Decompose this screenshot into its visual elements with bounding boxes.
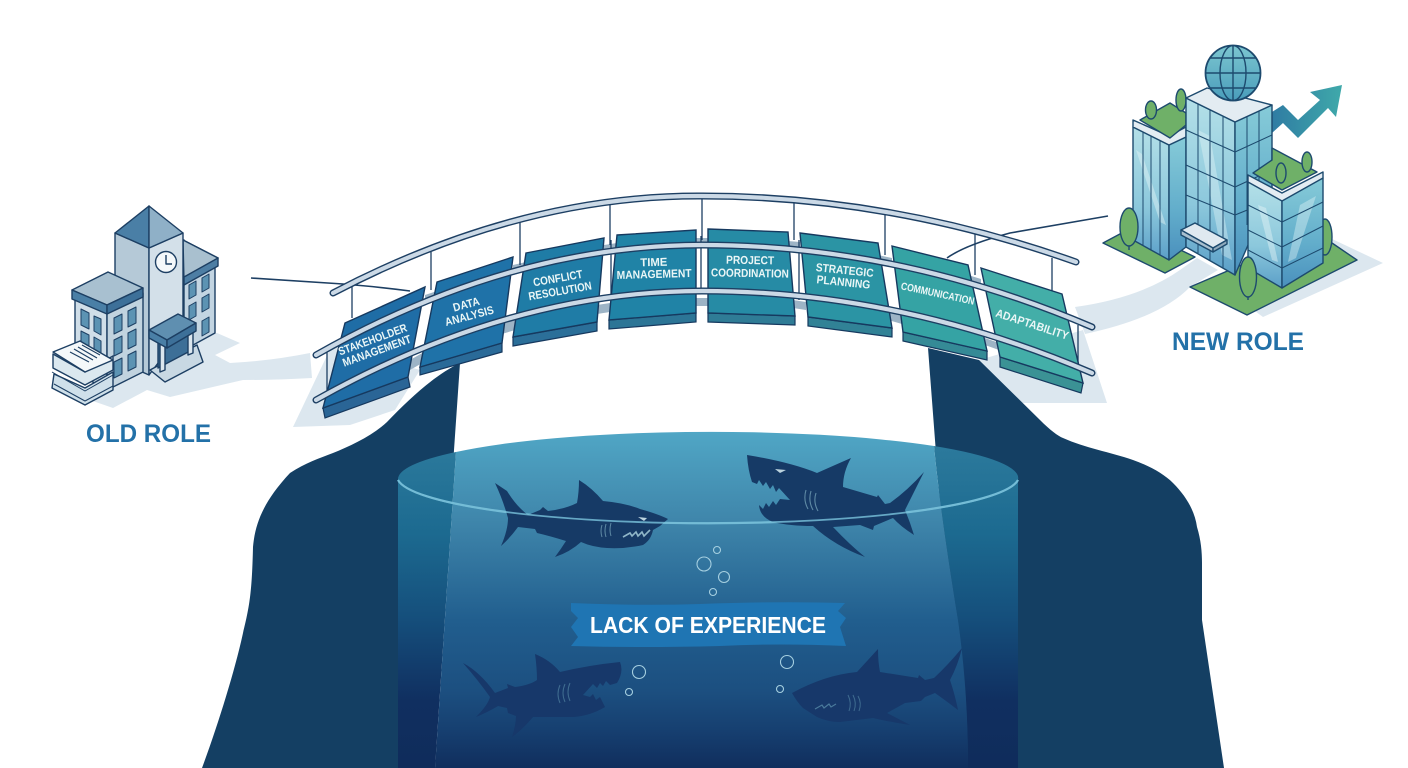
plank: communication: COMMUNICATION [900,280,976,308]
left tower [1133,89,1186,260]
lawn: left [1103,227,1195,273]
label: new role: NEW ROLE [1172,328,1304,356]
handrail: middle [316,245,1092,355]
plank: data analysis: ANALYSIS [444,304,496,329]
bridge [316,196,1092,418]
clock tower [115,206,183,375]
plank: time management [609,230,696,329]
plank: stakeholder management: STAKEHOLDER [337,322,409,358]
plank: data analysis: DATA [452,296,481,314]
plank: project coordination: COORDINATION [711,267,789,281]
shark: top right [747,455,924,557]
plank: project coordination [708,229,795,325]
plank: stakeholder management [323,287,425,418]
ground path: old role [90,333,312,408]
label: old role: OLD ROLE [86,420,211,448]
tree: left lawn [1120,208,1138,250]
central tower [1186,88,1272,275]
plank: stakeholder management: MANAGEMENT [341,334,413,370]
porch [149,314,203,382]
tree: behind [1318,219,1332,255]
old role building [52,206,218,405]
new role building [1103,46,1357,315]
lawn: right [1190,240,1357,315]
plank: conflict resolution: RESOLUTION [528,280,593,303]
suspension cable: right [947,216,1108,258]
plank: strategic planning: STRATEGIC [815,262,874,280]
plank: communication [892,246,987,360]
water side: left [398,452,456,768]
plank: conflict resolution: CONFLICT [532,269,584,289]
plank: adaptability [981,268,1083,393]
plank: time management: TIME [640,257,668,269]
water surface front line over sharks [398,480,1018,523]
vertical posts [327,197,1078,400]
ground shadow: left bridge abutment [293,345,420,427]
chasm cliff: right [928,348,1224,768]
handrail: lower [316,291,1092,400]
plank: strategic planning [800,233,892,337]
water center [435,432,968,768]
chasm cliff: left [202,363,460,768]
plank: adaptability: ADAPTABILITY [994,308,1070,343]
ribbon: lack of experience [571,602,846,647]
plank: time management: MANAGEMENT [617,268,692,282]
water cylinder [398,432,1018,768]
shark: top left [495,480,668,557]
plank: data analysis [420,257,513,375]
plank: project coordination: PROJECT [726,255,774,267]
left wing [72,272,143,390]
shark: bottom left [463,654,621,737]
ribbon: lack of experience: LACK OF EXPERIENCE [590,612,826,638]
suspension cable: left [251,278,410,291]
plank: conflict resolution [513,238,604,346]
water surface rim [398,480,1018,523]
paper stack [52,341,113,405]
cross beams [410,238,999,370]
handrail: top [333,196,1076,293]
water side: right [934,446,1018,768]
ground shadow: new role [1240,238,1383,317]
plank: strategic planning: PLANNING [816,274,871,292]
tree: front lawn [1240,257,1256,300]
shark: bottom right [792,648,962,725]
growth arrow [1272,85,1342,138]
entrance canopy [1181,223,1227,252]
right wing [183,240,218,350]
globe [1206,46,1260,100]
ground shadow: right bridge abutment [979,330,1107,403]
right building [1248,148,1323,288]
ground path: new role [1075,258,1218,334]
bubbles [626,546,794,696]
